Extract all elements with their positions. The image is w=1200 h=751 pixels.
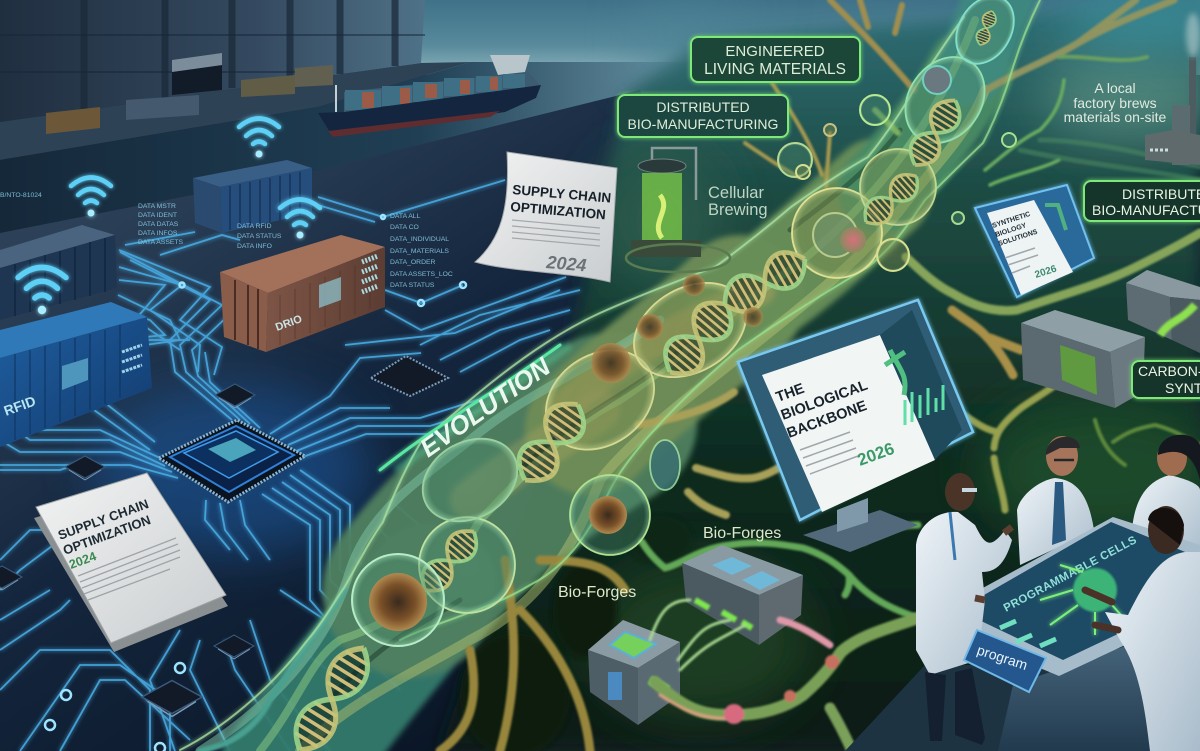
label: program: program <box>975 642 1030 673</box>
floating data text: DATA_MATERIALS <box>390 248 449 255</box>
label: Carbon-Negative Synthesis <box>1132 361 1200 398</box>
vine bright edge strands <box>180 0 1040 750</box>
main microchip <box>159 420 305 502</box>
monitor: The Biological Backbone 2026 <box>738 300 973 552</box>
floating data text: DATA CO <box>390 224 419 231</box>
paper: Supply Chain Optimization 2024 curled page <box>475 152 617 282</box>
DNA helices <box>285 9 999 751</box>
paper: Supply Chain Optimization 2024 report (desk): OPTIMIZATION <box>61 512 153 558</box>
paper: Supply Chain Optimization 2024 report (desk): 2024 <box>67 549 98 572</box>
monitor: The Biological Backbone 2026: 2026 <box>855 439 897 470</box>
scientist left <box>916 473 1012 745</box>
dark gaps in trunk <box>460 516 692 751</box>
floating data text: DATA DATAS <box>138 221 179 228</box>
icon: bioreactor <box>626 148 730 272</box>
floating data text: DATA RFID <box>237 223 272 230</box>
text: Cellular Brewing: Brewing <box>708 201 768 219</box>
floor <box>0 90 760 751</box>
left upper container <box>0 225 117 320</box>
paper: Supply Chain Optimization 2024 report (desk): SUPPLY CHAIN <box>56 496 151 543</box>
label: Engineered Living Materials: LIVING MATERIALS <box>704 61 846 78</box>
floating data text: DATA_INDIVIDUAL <box>390 236 449 243</box>
trunk ropes and shadows <box>200 20 985 751</box>
text: local factory note: A local <box>1094 80 1136 96</box>
right side dark green ground <box>440 0 1200 751</box>
floor platform under lab <box>845 660 1200 751</box>
floating data text: DATA_ORDER <box>390 259 436 266</box>
text: local factory note: materials on-site <box>1064 109 1167 125</box>
vine trunk base <box>285 0 1000 751</box>
monitor: The Biological Backbone 2026: THE <box>774 381 807 406</box>
small circuit chips <box>0 384 255 716</box>
paper: Supply Chain Optimization 2024 curled page: OPTIMIZATION <box>510 199 606 222</box>
water channel <box>0 62 700 233</box>
icon: factory <box>1145 13 1200 165</box>
warehouse wall <box>0 0 470 160</box>
floating data text: DATA STATUS <box>237 233 282 240</box>
floating data text: DATA ASSETS <box>138 239 184 246</box>
floating data text <box>0 192 453 289</box>
tablet: Synthetic Biology Solutions 2026: SYNTHETIC <box>991 211 1031 230</box>
floating data text: DATA INFO <box>237 243 272 250</box>
large processor upper right <box>371 356 448 396</box>
interactive table <box>937 517 1200 751</box>
monitor: The Biological Backbone 2026: BACKBONE <box>785 398 869 442</box>
rust container: DRIO <box>274 313 304 334</box>
text: Cellular Brewing: Cellular <box>708 184 764 202</box>
translucent cell lobes along trunk <box>408 0 1026 613</box>
label: Distributed Bio-Manufacturing: BIO-MANUFACTURING <box>628 116 778 132</box>
blue container front with RFID: RFID <box>2 393 38 419</box>
rust container <box>220 235 385 352</box>
floating data text: B/NTO-81024 <box>0 192 42 199</box>
biological cells and nuclei <box>352 66 1016 646</box>
label: Distributed Bio-Manufacturing <box>618 95 788 137</box>
paper: Supply Chain Optimization 2024 curled page: SUPPLY CHAIN <box>512 182 612 206</box>
cargo ship <box>318 55 541 137</box>
bio-forge connecting tubes <box>650 600 918 751</box>
tablet: Synthetic Biology Solutions 2026: 2026 <box>1034 263 1059 281</box>
scientist foreground right <box>1085 506 1200 751</box>
blue container back <box>193 160 312 233</box>
evolution banner: EVOLUTION <box>414 351 557 463</box>
text: Bio-Forges lower: Bio-Forges <box>558 584 636 601</box>
circuit traces <box>0 180 580 751</box>
scientist centre with glasses <box>1017 436 1094 565</box>
tablet: Synthetic Biology Solutions 2026 <box>975 185 1094 297</box>
soft blue glow behind chip <box>92 385 372 555</box>
label: Distributed Bio-Manufacturing: DISTRIBUTED <box>656 99 750 115</box>
interactive table: PROGRAMMABLE CELLS <box>1002 534 1139 615</box>
blue container front with RFID <box>0 302 152 447</box>
scientist right rear woman <box>1132 435 1200 560</box>
bio-forge unit front <box>588 620 680 725</box>
floating data text: DATA INFOS <box>138 230 178 237</box>
label: Distributed Bio-Manufacturing right <box>1084 181 1200 221</box>
floating data text: DATA ASSETS_LOC <box>390 271 453 278</box>
floating data text: DATA IDENT <box>138 212 177 219</box>
wifi signals <box>18 118 320 314</box>
tablet: Synthetic Biology Solutions 2026: SOLUTIONS <box>997 229 1039 248</box>
floating data text: DATA ALL <box>390 213 421 220</box>
text: local factory note: factory brews <box>1073 95 1157 111</box>
bio-forge unit rear <box>682 545 803 645</box>
floating data text: DATA MSTR <box>138 203 176 210</box>
text: Bio-Forges upper: Bio-Forges <box>703 525 781 542</box>
floating data text: DATA STATUS <box>390 282 435 289</box>
paper: Supply Chain Optimization 2024 report (desk) <box>34 473 228 652</box>
monitor: The Biological Backbone 2026: BIOLOGICAL <box>779 378 870 424</box>
label: program <box>964 630 1046 692</box>
circuit nodes <box>45 215 466 751</box>
label: Engineered Living Materials <box>691 37 860 82</box>
server bio units <box>1021 270 1200 408</box>
paper: Supply Chain Optimization 2024 curled page: 2024 <box>545 252 587 275</box>
tablet: Synthetic Biology Solutions 2026: BIOLOGY <box>994 222 1028 239</box>
label: Engineered Living Materials: ENGINEERED <box>725 43 825 60</box>
